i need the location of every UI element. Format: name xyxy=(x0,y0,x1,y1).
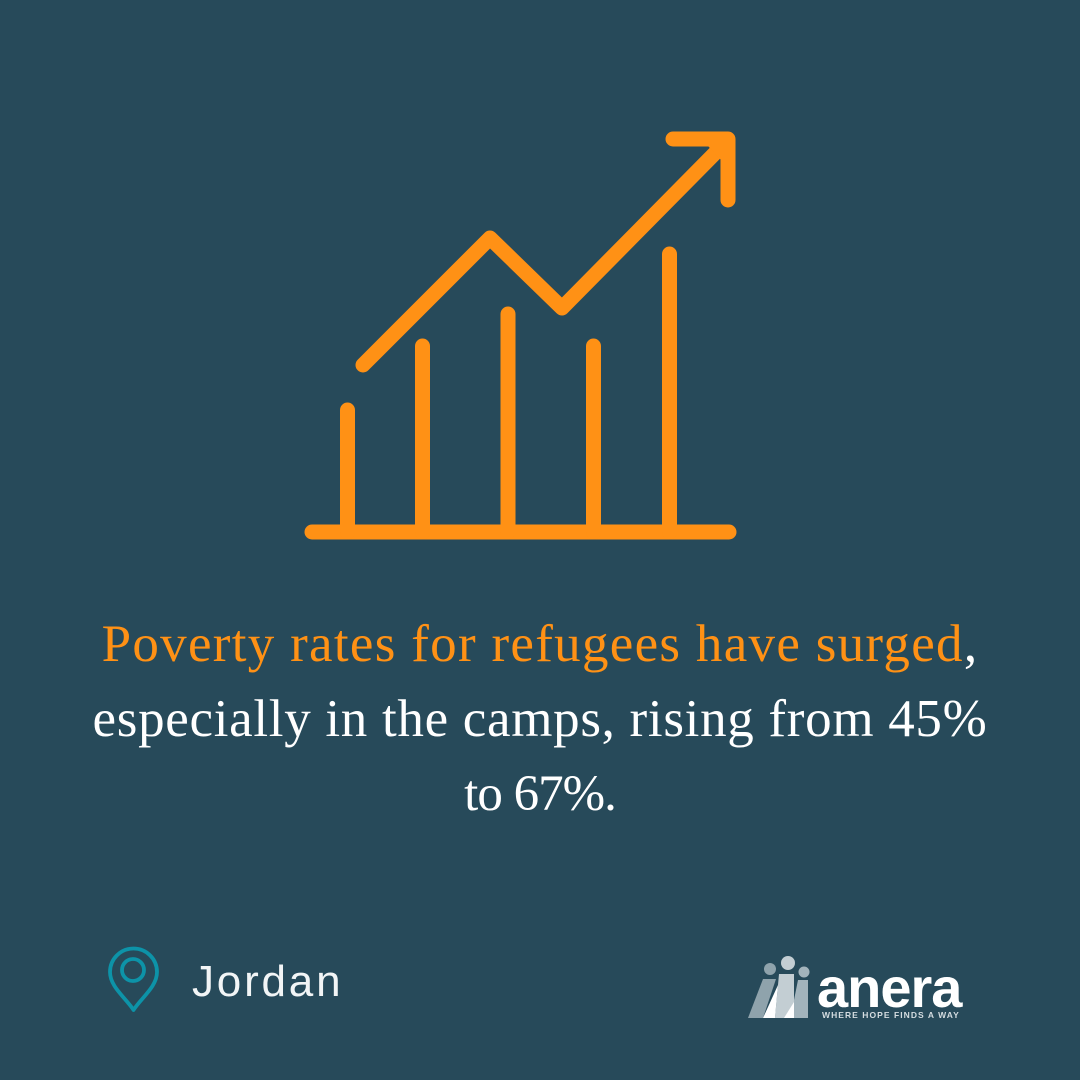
icon: location pin xyxy=(108,946,159,1012)
chart bars xyxy=(348,254,670,532)
logo wordmark: anera xyxy=(817,956,961,1019)
main statement text: Poverty rates for refugees have surged, xyxy=(102,615,978,673)
main statement text: especially in the camps, rising from 45% xyxy=(93,690,987,748)
trend arrow xyxy=(363,139,728,365)
logo tagline: WHERE HOPE FINDS A WAY xyxy=(822,1010,960,1020)
main statement text: to 67%. xyxy=(464,766,616,822)
chart baseline xyxy=(312,524,729,540)
location label: Jordan xyxy=(192,957,343,1006)
main statement text xyxy=(93,615,987,822)
logo figures xyxy=(748,956,810,1018)
logo: anera xyxy=(748,956,963,1020)
